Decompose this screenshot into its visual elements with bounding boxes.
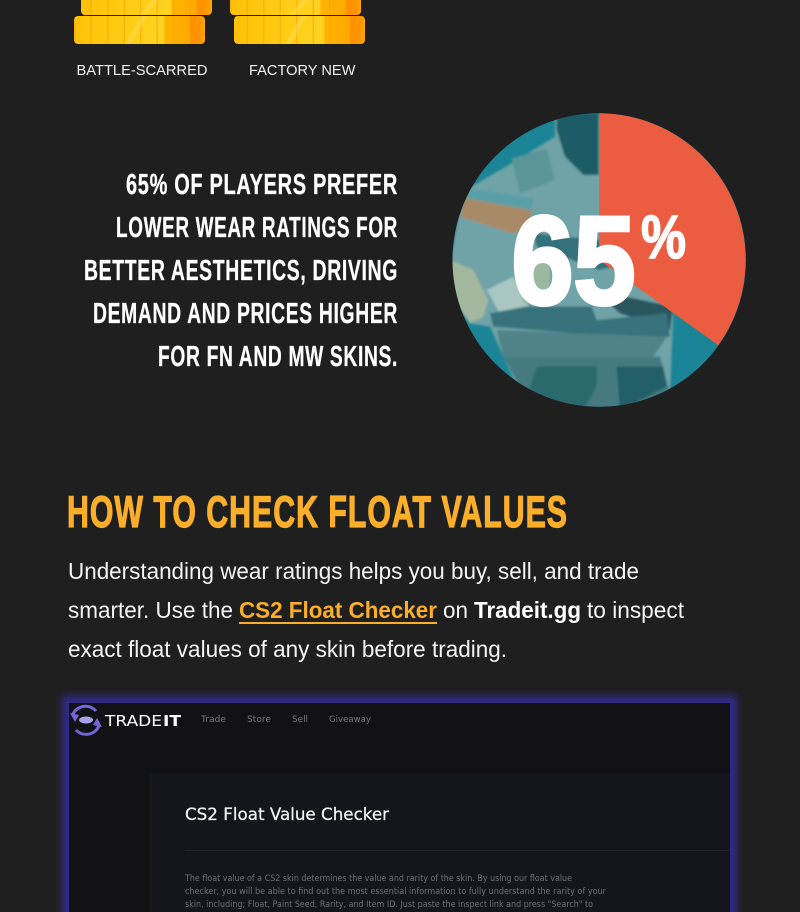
body paragraph: [68, 558, 685, 662]
body paragraph: to inspect: [587, 597, 685, 623]
percent sign: %: [641, 203, 686, 271]
stat text: 65% of players: LOWER WEAR RATINGS FOR: [116, 212, 398, 244]
logo wordmark: IT: [163, 712, 182, 730]
link: CS2 Float Checker: CS2 Float Checker: [239, 597, 437, 623]
screenshot: tradeit float checker: [62, 696, 737, 912]
coin stack: battle-scarred: [74, 0, 212, 44]
stat text: 65% of players: 65% OF PLAYERS PREFER: [126, 169, 398, 201]
pie slice: 65 percent red: [599, 113, 746, 345]
pie base: teal slice: [452, 113, 746, 407]
body paragraph: Understanding wear ratings helps you buy, sell, and trade: [68, 558, 639, 584]
screenshot glow: [62, 696, 737, 912]
pie chart: 65 percent: [450, 113, 746, 410]
body paragraph: smarter. Use the: [68, 597, 233, 623]
body paragraph: Tradeit.gg: [474, 597, 581, 623]
screenshot description: skin, including; Float, Paint Seed, Rarity, and Item ID. Just paste the inspect link and press "Search" to: [185, 900, 593, 910]
nav links: Giveaway: [329, 715, 372, 725]
body paragraph: on: [443, 597, 468, 623]
coin stack: factory new: [230, 0, 365, 44]
stat text: 65% of players: BETTER AESTHETICS, DRIVING: [84, 255, 398, 287]
body paragraph: exact float values of any skin before trading.: [68, 636, 507, 662]
screenshot frame: [69, 703, 730, 912]
stat text: 65% of players: DEMAND AND PRICES HIGHER: [93, 298, 398, 330]
label: battle-scarred: BATTLE-SCARRED: [76, 63, 208, 79]
nav links: Trade: [200, 715, 226, 725]
content panel: [150, 774, 730, 912]
screenshot title: CS2 Float Value Checker: [185, 805, 389, 825]
logo wordmark: [104, 712, 182, 730]
stat text: 65% of players: FOR FN AND MW SKINS.: [158, 341, 398, 373]
logo wordmark: TRADE: [104, 712, 162, 730]
nav links: Store: [247, 715, 271, 725]
screenshot description: checker, you will be able to find out the most essential information to fully understand the rarity of your: [185, 887, 606, 897]
nav links: Sell: [292, 715, 308, 725]
stat text: 65% of players: [84, 169, 398, 373]
soldier illustration: [450, 113, 673, 410]
nav links: [200, 715, 372, 725]
icon: tradeit logo: [70, 706, 102, 734]
screenshot description: [184, 874, 606, 910]
screenshot description: The float value of a CS2 skin determines the value and rarity of the skin. By using our float value: [184, 874, 572, 884]
pie number: 65: [512, 192, 636, 331]
label: factory new: FACTORY NEW: [249, 63, 356, 79]
heading: how to check float values: HOW TO CHECK FLOAT VALUES: [67, 488, 568, 537]
